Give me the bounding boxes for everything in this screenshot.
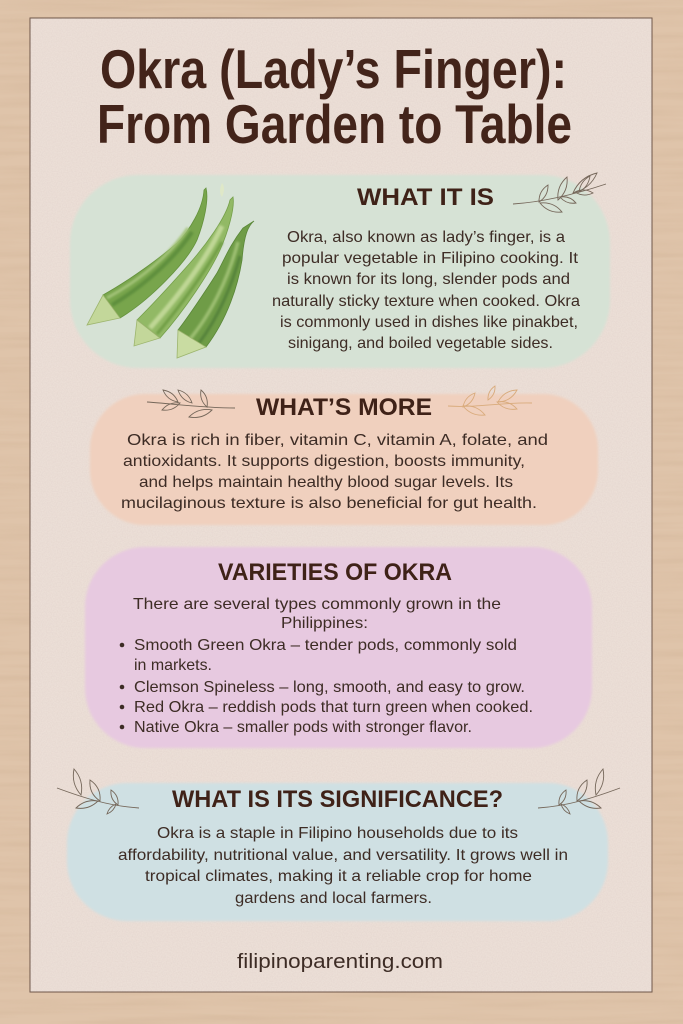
panel background <box>67 783 608 921</box>
icon: okra pod 3 <box>177 221 254 358</box>
intro text: Philippines: <box>281 615 368 632</box>
heading: WHAT IT IS <box>357 184 494 211</box>
bullet list: Red Okra – reddish pods that turn green when cooked. <box>134 699 533 716</box>
okra illustration <box>87 183 254 358</box>
body text <box>118 825 568 907</box>
body text: popular vegetable in Filipino cooking. It <box>282 250 579 267</box>
icon: sprig right <box>448 386 532 415</box>
body text: antioxidants. It supports digestion, boosts immunity, <box>123 453 525 470</box>
body text: Okra, also known as lady’s finger, is a <box>287 229 565 246</box>
body text: is commonly used in dishes like pinakbet, <box>280 314 578 331</box>
heading: WHAT’S MORE <box>256 394 432 421</box>
body text: Okra is a staple in Filipino households due to its <box>157 825 518 842</box>
title: Okra (Lady’s Finger): <box>100 38 567 100</box>
bullet list: Clemson Spineless – long, smooth, and easy to grow. <box>134 679 525 696</box>
heading: VARIETIES OF OKRA <box>218 559 452 586</box>
panel: what it is <box>70 173 610 368</box>
body text: Okra is rich in fiber, vitamin C, vitamin A, folate, and <box>127 432 548 449</box>
body text: tropical climates, making it a reliable crop for home <box>145 868 532 885</box>
body text: naturally sticky texture when cooked. Okra <box>272 293 580 310</box>
intro text: There are several types commonly grown in the <box>133 596 501 613</box>
icon: sprig left <box>147 390 235 418</box>
bullet list: Native Okra – smaller pods with stronger flavor. <box>134 719 472 736</box>
icon: sprig right <box>538 769 620 814</box>
body text: is known for its long, slender pods and <box>287 271 570 288</box>
body text: and helps maintain healthy blood sugar levels. Its <box>139 474 513 491</box>
panel: what's more <box>90 386 598 525</box>
intro text <box>133 596 501 632</box>
body text <box>272 229 580 352</box>
bullet list: in markets. <box>134 657 212 674</box>
body text: affordability, nutritional value, and versatility. It grows well in <box>118 847 568 864</box>
bullet list: Smooth Green Okra – tender pods, commonly sold <box>134 637 517 654</box>
bullet list <box>120 637 533 736</box>
body text: gardens and local farmers. <box>235 890 432 907</box>
icon: sprig left <box>57 769 139 814</box>
title <box>97 38 572 155</box>
panel background <box>85 547 592 748</box>
panel background <box>90 394 598 525</box>
title: From Garden to Table <box>97 93 572 155</box>
panel background <box>70 175 610 368</box>
heading: WHAT IS ITS SIGNIFICANCE? <box>172 786 503 813</box>
website footer: filipinoparenting.com <box>237 951 443 973</box>
body text: mucilaginous texture is also beneficial for gut health. <box>121 495 537 512</box>
body text <box>121 432 548 512</box>
panel: varieties of okra <box>85 547 592 748</box>
panel: what is its significance <box>57 769 620 921</box>
icon: sprig <box>513 173 606 212</box>
icon: okra pod 1 <box>87 183 224 325</box>
body text: sinigang, and boiled vegetable sides. <box>288 335 553 352</box>
icon: okra pod 2 <box>134 197 233 346</box>
